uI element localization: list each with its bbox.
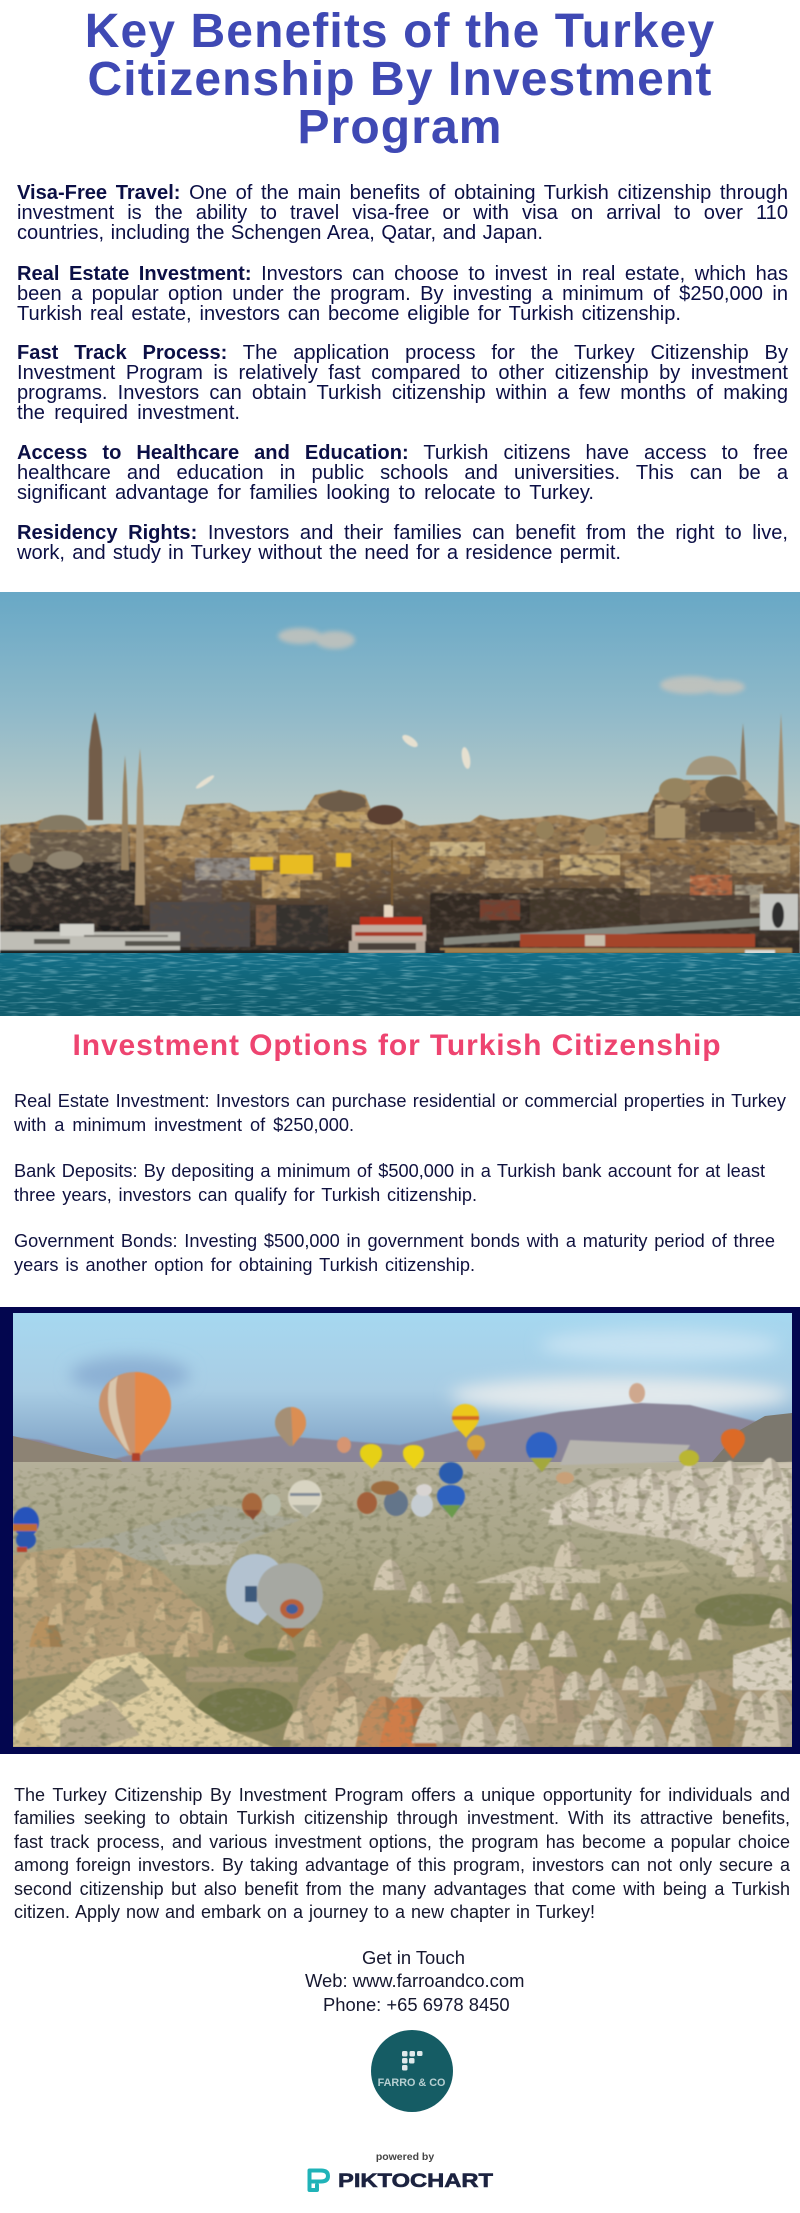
pale plain and paths (60, 1505, 300, 1560)
text block: closing paragraph (14, 1785, 790, 1922)
benefit: visa-free travel (17, 183, 788, 243)
option: government bonds: years is another option for obtaining Turkish citizenship. (14, 1255, 475, 1275)
large orange balloon (98, 1371, 136, 1456)
tower and minarets (88, 712, 103, 820)
option: bank deposits (14, 1161, 765, 1205)
contact details: Web: www.farroandco.com (305, 1970, 524, 1991)
text block: closing paragraph: families seeking to obtain Turkish citizenship through investment. With its attractive benefits, (14, 1808, 790, 1828)
text block: closing paragraph: The Turkey Citizenship By Investment Program offers a unique opportunity for individuals and (14, 1785, 790, 1805)
logo: Piktochart (308, 2168, 494, 2192)
photo frame: navy border (0, 1307, 800, 1754)
arch building (760, 894, 798, 930)
sea (0, 953, 800, 1016)
birds (195, 733, 472, 790)
benefit: residency rights (17, 523, 788, 563)
benefit: fast track process (17, 343, 788, 423)
ground texture (13, 1468, 792, 1747)
striped balloon (274, 1406, 294, 1446)
red balloon right (721, 1429, 745, 1459)
option: bank deposits: Bank Deposits: By depositing a minimum of $500,000 in a Turkish bank account for at least (14, 1161, 765, 1181)
large sand mound (13, 1652, 273, 1747)
option: real estate: Real Estate Investment: Investors can purchase residential or commercial properties in Turkey (14, 1091, 786, 1111)
sky (0, 592, 800, 852)
sky (13, 1313, 792, 1460)
option: real estate (14, 1091, 786, 1135)
benefit: healthcare and education (17, 443, 788, 503)
logo: Farro & Co: FARRO & CO (378, 2077, 445, 2089)
option: government bonds (14, 1231, 775, 1275)
icon: Piktochart mark (310, 2170, 328, 2190)
photo: Cappadocia balloons (13, 1313, 792, 1747)
left ferry (0, 924, 345, 954)
small pink balloon far (337, 1437, 351, 1453)
hill trees (318, 792, 366, 812)
contact details (305, 1947, 524, 2015)
logo: Piktochart: PIKTOCHART (338, 2170, 493, 2192)
photo: Istanbul skyline (0, 592, 800, 1016)
skyline buildings (0, 712, 800, 963)
grey balloons (226, 1554, 283, 1625)
option: government bonds: Government Bonds: Investing $500,000 in government bonds with a maturity period of three (14, 1231, 775, 1251)
option: bank deposits: three years, investors can qualify for Turkish citizenship. (14, 1185, 477, 1205)
benefit: real estate investment (17, 264, 788, 324)
option: real estate: with a minimum investment of $250,000. (14, 1115, 354, 1135)
text block: closing paragraph: citizen. Apply now and embark on a journey to a new chapter in Turkey! (14, 1902, 595, 1922)
yellow balloons (452, 1404, 479, 1438)
title: Program (297, 101, 503, 154)
powered by label: powered by (376, 2151, 434, 2163)
blue balloons (525, 1431, 558, 1462)
valley floor (13, 1462, 792, 1752)
text block: investment options (14, 1091, 786, 1275)
left rock mass (13, 1548, 213, 1680)
yellow buildings (250, 853, 351, 874)
central ferry (347, 840, 428, 963)
green fields (695, 1594, 795, 1626)
clouds (278, 628, 745, 694)
text block: closing paragraph: fast track process, and various investment options, the program has become a popular choice (14, 1832, 790, 1852)
white rock ridge (540, 1462, 792, 1565)
bridge (440, 918, 792, 953)
balloons (13, 1372, 745, 1638)
mountains (17, 1402, 756, 1462)
text block: closing paragraph: second citizenship but also benefit from the many advantages that come with being a Turkish (14, 1879, 790, 1899)
right foreground rocks (290, 1640, 792, 1747)
title: Key Benefits of the Turkey (85, 5, 715, 58)
text block: benefits list (17, 183, 788, 563)
clouds (70, 1329, 790, 1413)
right mosque dome (686, 756, 737, 775)
left mosque dome (38, 815, 87, 830)
contact details: Phone: +65 6978 8450 (323, 1994, 510, 2015)
contact details: Get in Touch (362, 1947, 465, 1968)
text block: closing paragraph: among foreign investors. By taking advantage of this program, investors can not only secure a (14, 1855, 790, 1875)
title: Citizenship By Investment (88, 53, 712, 106)
title (85, 5, 715, 154)
top right pale balloon (629, 1383, 645, 1403)
cluster balloons (288, 1480, 322, 1514)
logo: Farro & Co (371, 2030, 453, 2112)
heading: investment options: Investment Options for Turkish Citizenship (73, 1029, 721, 1062)
